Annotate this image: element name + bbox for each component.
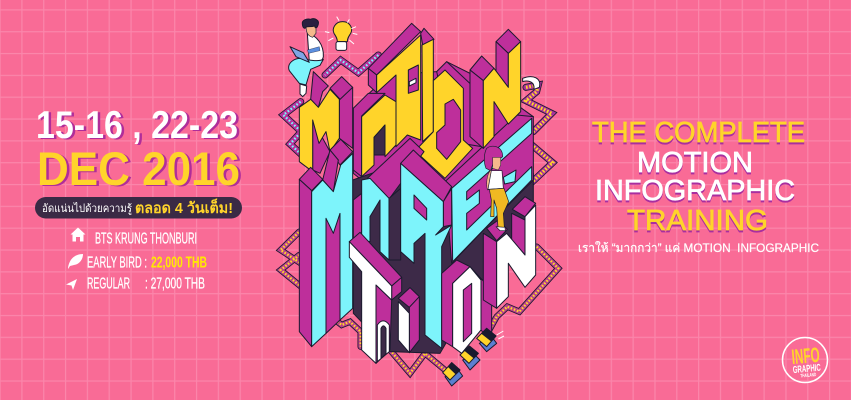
letter O arch	[353, 138, 424, 260]
letter I	[398, 288, 419, 353]
letter T	[368, 23, 421, 147]
rail tracks	[281, 55, 558, 373]
early bird row	[68, 254, 207, 272]
letter O arch	[353, 93, 396, 177]
pill: full four days: อัดแน่นไปด้วยความรู้	[42, 202, 132, 215]
train car 3	[477, 328, 504, 352]
base masses	[353, 62, 533, 353]
letter M	[299, 139, 353, 347]
date line: 15-16 , 22-23: 15-16 , 22-23	[36, 104, 238, 147]
tagline: เราให้ “มากกว่า” แค่ MOTION INFOGRAPHIC	[578, 241, 819, 255]
regular row	[66, 276, 205, 292]
ribbon behind N	[523, 77, 540, 89]
logo: infographic thailand: GRAPHIC	[792, 363, 821, 376]
icon: feather	[68, 254, 83, 269]
letter E	[452, 118, 532, 262]
early bird row: EARLY BIRD :	[87, 254, 147, 272]
logo: infographic thailand: THAILAND	[800, 372, 817, 379]
word: MORE (middle, cyan)	[299, 118, 532, 348]
letter M	[299, 72, 353, 173]
title line: MOTION: MOTION	[637, 147, 753, 179]
word: MOTION (top, yellow)	[299, 23, 521, 178]
date line: 15-16 , 22-23: 15-16 , 22-23	[38, 105, 240, 148]
pill: full four days	[35, 197, 242, 218]
logo: infographic thailand: INFO	[791, 344, 821, 369]
word: MOTION (bottom, white)	[349, 197, 536, 363]
regular row: REGULAR	[87, 276, 130, 292]
title line: THE COMPLETE: THE COMPLETE	[592, 117, 805, 149]
title line: INFOGRAPHIC: INFOGRAPHIC	[595, 177, 795, 209]
letter N	[483, 197, 536, 308]
letter R	[401, 150, 452, 348]
base: magenta behind E	[445, 115, 533, 263]
course title	[592, 117, 805, 239]
letter T	[349, 232, 402, 363]
icon: light bulb	[325, 17, 357, 50]
icon: home	[70, 228, 86, 242]
title line: THE COMPLETE: THE COMPLETE	[592, 119, 805, 151]
letter I	[421, 28, 434, 142]
letter N	[470, 29, 521, 148]
letter O	[415, 62, 482, 178]
train car 2	[460, 346, 480, 370]
regular row: : 27,000 THB	[145, 276, 205, 292]
icon: navigation arrow	[66, 279, 77, 290]
train	[443, 328, 504, 386]
character: man with laptop	[289, 19, 323, 97]
character: girl with tablet	[484, 146, 516, 231]
date block	[36, 104, 242, 196]
base: dark shadow block	[353, 160, 533, 353]
date line: DEC 2016: DEC 2016	[40, 143, 242, 196]
base: first word	[353, 62, 533, 213]
venue row	[70, 228, 197, 248]
date line: DEC 2016: DEC 2016	[37, 142, 240, 195]
title line: TRAINING: TRAINING	[627, 205, 768, 237]
logo: infographic thailand	[782, 338, 828, 382]
track: lower tracks	[281, 228, 558, 373]
track: right side	[526, 85, 553, 184]
track: upper left cyan	[283, 55, 378, 160]
pill: full four days: ตลอด 4 วันเต็ม!	[135, 198, 233, 217]
title line: MOTION: MOTION	[637, 149, 753, 181]
title line: INFOGRAPHIC: INFOGRAPHIC	[595, 175, 795, 207]
venue row: BTS KRUNG THONBURI	[95, 230, 197, 248]
early bird row: 22,000 THB	[151, 254, 207, 272]
isometric 3D lettering artwork	[281, 17, 558, 386]
letter O	[442, 260, 492, 353]
train car 1	[443, 363, 463, 386]
title line: TRAINING: TRAINING	[627, 207, 768, 239]
